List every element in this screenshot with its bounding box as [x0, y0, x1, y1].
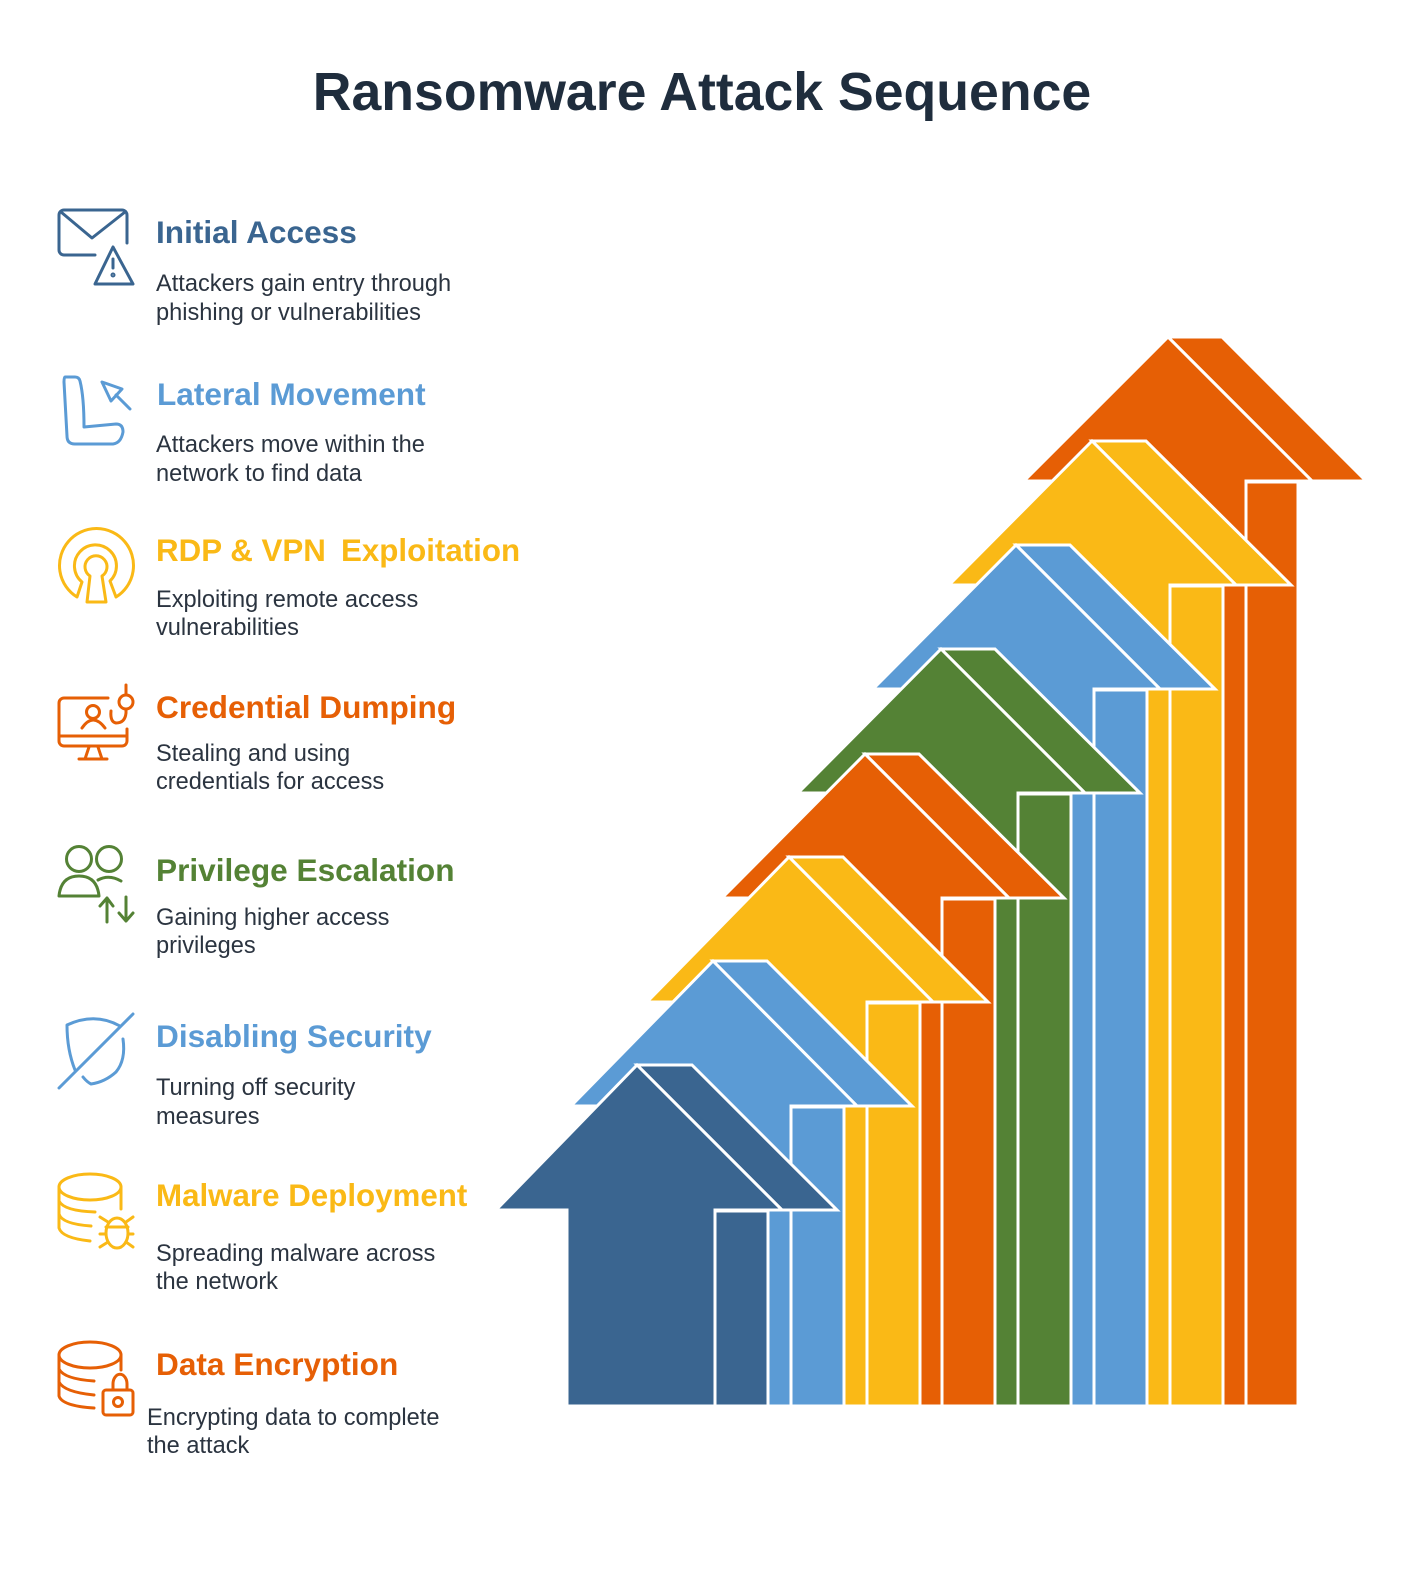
heading: Malware Deployment [156, 1178, 468, 1213]
description: Attackers move within the [156, 432, 425, 458]
icon: envelope with warning [59, 210, 133, 284]
description: measures [156, 1104, 260, 1130]
heading: Lateral Movement [157, 376, 426, 412]
description: phishing or vulnerabilities [156, 300, 421, 326]
heading: Initial Access [156, 214, 357, 250]
heading: Exploitation [341, 533, 520, 568]
heading: Data Encryption [156, 1346, 398, 1382]
step 7: malware deployment [59, 1174, 468, 1295]
heading: Credential Dumping [156, 689, 456, 725]
step 8: data encryption [59, 1342, 439, 1459]
description: Gaining higher access [156, 905, 389, 931]
arrow 4: credential dumping [722, 754, 1064, 1406]
arrow 6: disabling security [873, 545, 1215, 1406]
step 5: privilege escalation [59, 846, 455, 959]
title: Ransomware Attack Sequence [313, 62, 1091, 122]
description: the network [156, 1269, 278, 1295]
icon: keyhole signal [59, 529, 134, 602]
arrow 7: malware deployment [949, 441, 1291, 1406]
arrow staircase chart [496, 337, 1366, 1406]
description: credentials for access [156, 769, 384, 795]
description: privileges [156, 933, 256, 959]
arrow 2: lateral movement [571, 961, 912, 1406]
step 3: rdp and vpn exploitation [59, 529, 520, 641]
step 4: credential dumping [59, 685, 456, 795]
description: Exploiting remote access [156, 587, 418, 613]
description: Encrypting data to complete [147, 1405, 439, 1431]
heading: Privilege Escalation [156, 852, 455, 888]
description: Stealing and using [156, 741, 350, 767]
step 1: initial access [59, 210, 451, 326]
arrow 5: privilege escalation [798, 649, 1140, 1406]
icon: database with lock [59, 1342, 133, 1415]
arrow 3: rdp and vpn exploitation [647, 857, 988, 1406]
icon: crossed shield [59, 1014, 133, 1088]
step 6: disabling security [59, 1014, 432, 1130]
description: network to find data [156, 461, 363, 487]
description: Attackers gain entry through [156, 271, 451, 297]
description: vulnerabilities [156, 615, 299, 641]
description: the attack [147, 1433, 250, 1459]
arrow 8: data encryption [1024, 337, 1366, 1406]
icon: monitor with user and hook [59, 685, 133, 759]
icon: cursor path [64, 377, 130, 444]
icon: database with bug [59, 1174, 133, 1248]
description: Turning off security [156, 1075, 356, 1101]
step 2: lateral movement [64, 376, 426, 487]
icon: users with arrows [59, 846, 133, 922]
arrow 1: initial access [496, 1065, 837, 1406]
heading: RDP & VPN [156, 533, 326, 568]
description: Spreading malware across [156, 1241, 435, 1267]
heading: Disabling Security [156, 1018, 432, 1054]
